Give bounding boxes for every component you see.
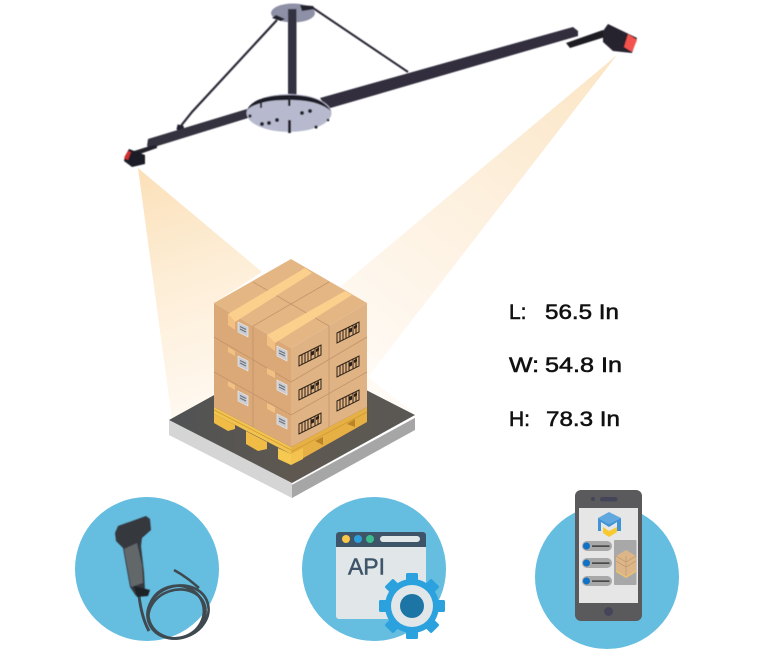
- right face: [291, 303, 367, 447]
- cable: [139, 570, 216, 646]
- dimensions readout: [509, 301, 622, 431]
- height: [509, 408, 620, 431]
- gear: [379, 573, 445, 639]
- light beam: right sensor: [340, 55, 617, 414]
- left arm: [134, 109, 248, 155]
- circle: [302, 497, 446, 641]
- length: L:: [509, 301, 527, 324]
- ceiling mount plate: [271, 4, 315, 22]
- length: [509, 301, 619, 324]
- left sensor: [124, 149, 145, 167]
- width: W:: [509, 354, 539, 377]
- browser window: API: [348, 554, 385, 580]
- circle: [75, 497, 219, 641]
- list rows: [582, 541, 612, 586]
- height: 78.3 In: [546, 408, 620, 431]
- box seams: [214, 282, 367, 427]
- packing tape: [228, 268, 352, 413]
- right sensor: [603, 24, 637, 53]
- barcode scanner icon: [75, 497, 219, 646]
- barcode labels: [238, 322, 287, 429]
- stacked cardboard boxes: [214, 259, 367, 447]
- scanner body: [115, 516, 151, 597]
- platform scale: [169, 352, 415, 498]
- center pole: [288, 9, 296, 97]
- right arm: [320, 27, 605, 109]
- circle: [535, 505, 679, 649]
- top face: [214, 259, 367, 348]
- height: H:: [509, 408, 530, 431]
- mobile app icon: [535, 490, 679, 649]
- central hub disc: [246, 94, 332, 133]
- overhead dimensioning rig: [124, 4, 637, 167]
- length: 56.5 In: [545, 301, 619, 324]
- handling symbols: [299, 322, 359, 434]
- phone body: [575, 490, 642, 621]
- width: [509, 354, 622, 377]
- wooden pallet: [214, 407, 367, 465]
- light beam: left sensor: [138, 168, 262, 420]
- app logo: [598, 512, 621, 537]
- app panel with mini pallet: [614, 540, 636, 585]
- browser window: [336, 532, 426, 619]
- API icon: [302, 497, 446, 641]
- width: 54.8 In: [545, 354, 622, 377]
- support wires: [177, 8, 408, 132]
- left face: [214, 303, 291, 447]
